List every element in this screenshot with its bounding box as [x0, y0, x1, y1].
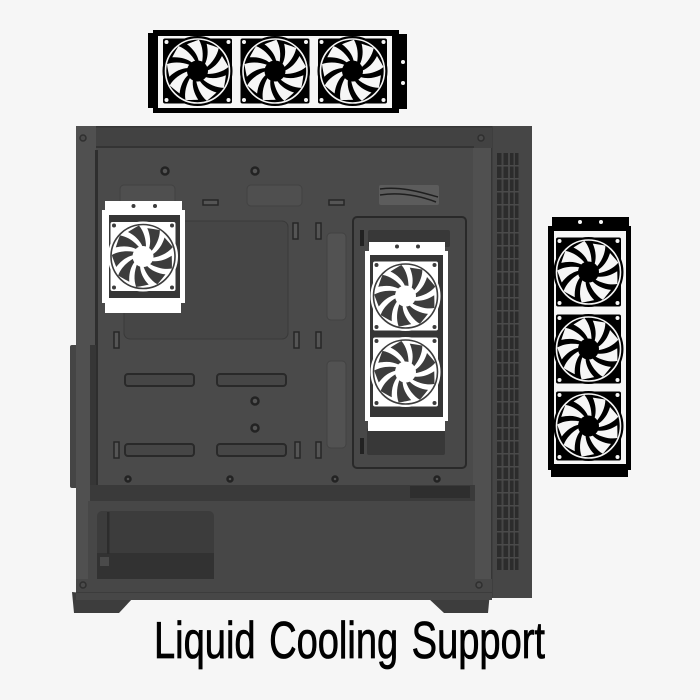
right frame — [473, 148, 491, 598]
top fan 1 — [162, 36, 232, 106]
side fan 2 — [554, 314, 624, 384]
top rail — [76, 126, 492, 148]
side fan 1 — [554, 237, 624, 307]
radiator frame — [548, 217, 631, 477]
vertical cutouts — [327, 233, 346, 448]
bottom shelf strip — [90, 485, 475, 501]
radiator frame — [148, 30, 407, 113]
case feet — [72, 592, 490, 613]
fan — [108, 222, 178, 292]
bottom rail — [76, 579, 492, 600]
right case bracket with two fans — [365, 242, 448, 431]
top fan 3 — [318, 36, 388, 106]
interior panel — [96, 148, 473, 488]
top fan 2 — [240, 36, 310, 106]
side radiator — [548, 217, 631, 477]
PC case — [70, 126, 532, 613]
standoffs — [126, 168, 440, 482]
PSU window — [97, 511, 214, 579]
PSU shroud — [88, 501, 475, 579]
corner screws — [80, 135, 484, 588]
small slots — [114, 200, 344, 458]
radiator mount opening — [353, 217, 466, 468]
left case bracket with fan — [102, 201, 185, 313]
bracket frame — [102, 201, 185, 313]
upper fan — [370, 261, 440, 331]
motherboard cutout — [124, 221, 288, 339]
top cutouts — [120, 185, 302, 206]
cable pass-through — [379, 185, 439, 205]
front vents — [497, 153, 518, 570]
cable tie slots — [125, 374, 286, 456]
lower fan — [370, 337, 440, 407]
bracket frame — [365, 242, 448, 431]
side fan 3 — [554, 391, 624, 461]
left frame — [76, 126, 96, 600]
top radiator — [148, 30, 407, 113]
title: Liquid Cooling Support — [154, 612, 545, 670]
case body — [76, 126, 492, 600]
front panel — [491, 126, 532, 598]
case side bulge — [70, 345, 78, 488]
